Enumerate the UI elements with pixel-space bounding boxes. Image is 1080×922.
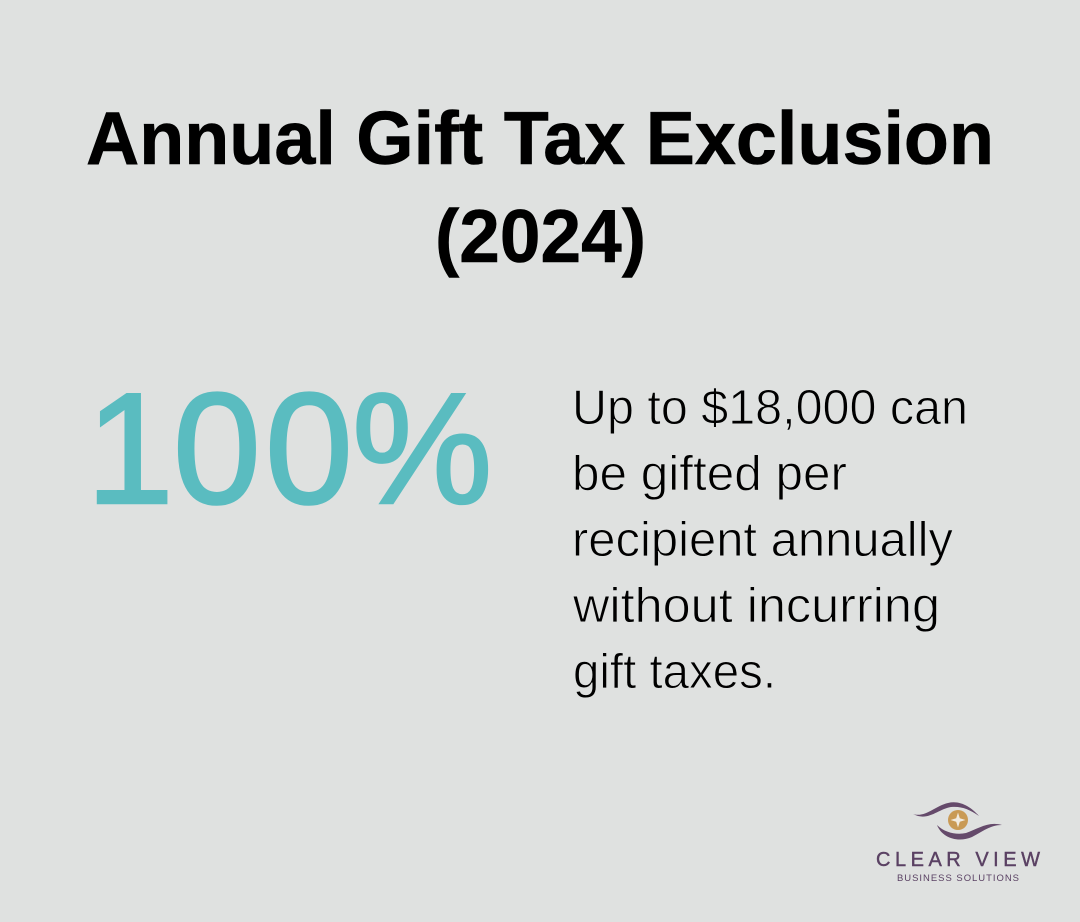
icon: eye: [913, 802, 1002, 840]
description text: recipient annually: [572, 513, 953, 567]
logo tagline: BUSINESS SOLUTIONS: [897, 873, 1020, 884]
title: [86, 96, 994, 278]
title: (2024): [435, 194, 646, 278]
description text: Up to $18,000 can: [572, 381, 968, 435]
description text: [572, 381, 968, 699]
description text: be gifted per: [572, 447, 847, 501]
big stat: 100%: 0: [265, 361, 353, 537]
description text: without incurring: [572, 579, 940, 633]
big stat: 100%: 0: [173, 361, 261, 537]
title: Annual Gift Tax Exclusion: [86, 96, 994, 180]
logo wordmark: CLEAR VIEW: [876, 849, 1040, 871]
logo: Clear View Business Solutions: [876, 802, 1040, 884]
big stat: 100%: %: [352, 361, 492, 537]
big stat: 100%: 1: [86, 361, 174, 537]
description text: gift taxes.: [573, 645, 776, 699]
